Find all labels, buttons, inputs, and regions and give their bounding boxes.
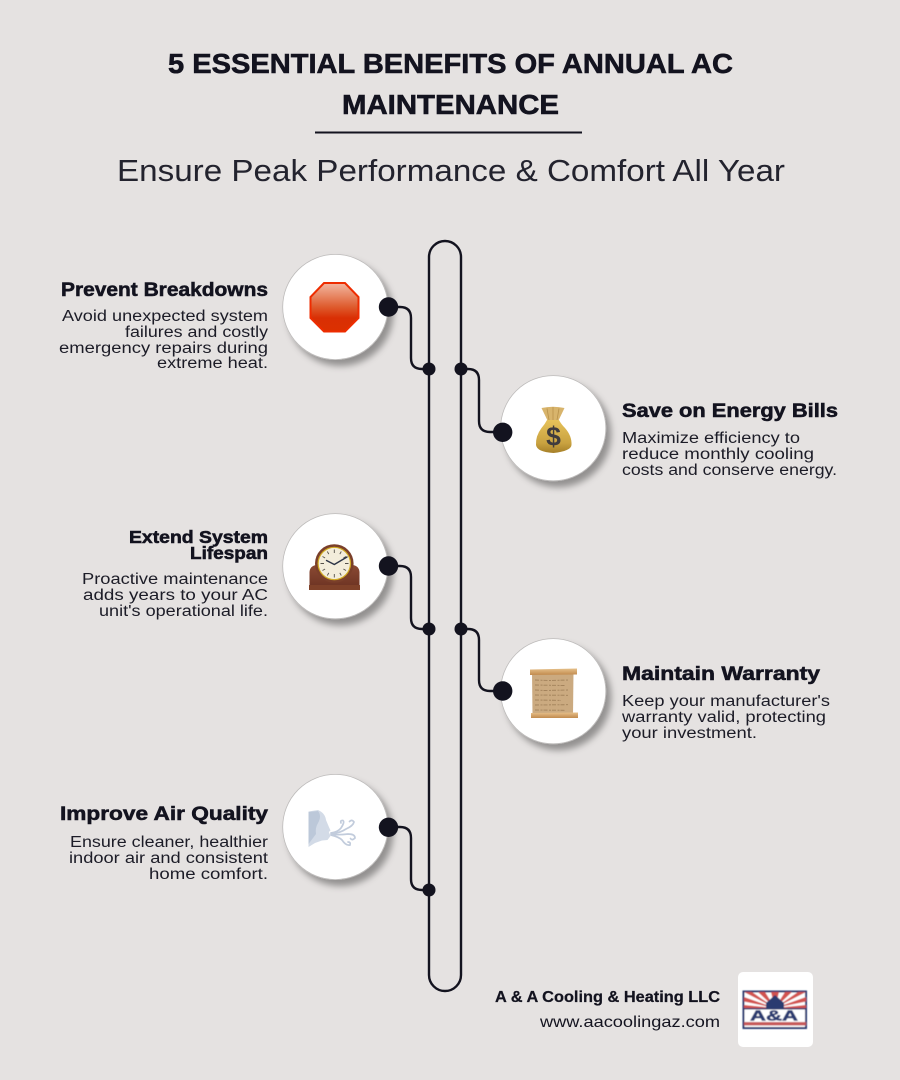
connector 2 xyxy=(461,369,503,432)
connector 4 xyxy=(461,629,503,691)
node 4 xyxy=(454,622,468,636)
description 5 xyxy=(69,834,269,883)
subtitle: Ensure Peak Performance & Comfort All Year xyxy=(117,153,785,188)
heading 2: Save on Energy Bills xyxy=(622,401,838,422)
heading 1: Prevent Breakdowns xyxy=(61,280,268,301)
dot 2 xyxy=(493,423,512,442)
connector 3 xyxy=(389,566,429,629)
node 2 xyxy=(454,362,468,376)
dot 4 xyxy=(493,681,512,701)
description 1 xyxy=(59,308,268,372)
description 1: Avoid unexpected system xyxy=(62,308,268,325)
node 3 xyxy=(422,622,436,636)
heading 3 xyxy=(129,527,268,563)
description 2 xyxy=(622,430,837,479)
central timeline track xyxy=(429,241,461,991)
description 5: Ensure cleaner, healthier xyxy=(70,834,268,851)
benefit: prevent breakdowns xyxy=(59,254,436,376)
icon circle 2 xyxy=(501,376,606,481)
description 1: emergency repairs during xyxy=(59,340,268,357)
description 4: Keep your manufacturer's xyxy=(622,693,830,710)
description 2: reduce monthly cooling xyxy=(622,446,814,463)
description 1: extreme heat. xyxy=(157,355,268,372)
icon: scroll xyxy=(530,668,578,718)
dot 3 xyxy=(379,556,398,576)
company logo: A&A xyxy=(750,1008,799,1024)
dot 5 xyxy=(379,818,398,837)
connector 5 xyxy=(389,827,429,890)
description 4 xyxy=(621,693,830,742)
icon circle 5 xyxy=(283,774,388,880)
connector 1 xyxy=(389,307,429,369)
node 1 xyxy=(422,362,436,376)
title: 5 ESSENTIAL BENEFITS OF ANNUAL AC xyxy=(168,48,733,79)
title: MAINTENANCE xyxy=(342,89,559,120)
description 3: adds years to your AC xyxy=(83,587,268,604)
benefit: save on energy bills xyxy=(454,362,838,481)
description 3: unit's operational life. xyxy=(99,603,268,620)
dot 1 xyxy=(379,297,398,317)
description 2: costs and conserve energy. xyxy=(622,462,837,479)
icon: money bag xyxy=(536,407,572,453)
footer website: www.aacoolingaz.com xyxy=(539,1014,720,1031)
heading 3: Extend System xyxy=(129,527,268,547)
heading 5: Improve Air Quality xyxy=(60,804,269,825)
description 4: warranty valid, protecting xyxy=(621,709,826,726)
description 2: Maximize efficiency to xyxy=(622,430,800,447)
description 5: home comfort. xyxy=(149,866,268,883)
description 1: failures and costly xyxy=(125,324,268,341)
description 5: indoor air and consistent xyxy=(69,850,269,867)
description 3: Proactive maintenance xyxy=(82,571,268,588)
icon: wind face xyxy=(308,810,355,847)
icon circle 4 xyxy=(501,639,606,744)
icon circle 1 xyxy=(283,254,388,360)
heading 4: Maintain Warranty xyxy=(622,664,821,685)
company logo xyxy=(738,972,813,1047)
footer company name: A & A Cooling & Heating LLC xyxy=(495,989,720,1006)
heading 3: Lifespan xyxy=(190,543,268,563)
description 3 xyxy=(82,571,268,620)
icon: stop sign xyxy=(310,283,358,332)
description 4: your investment. xyxy=(622,725,757,742)
icon: money bag: $ xyxy=(546,422,561,452)
benefit: maintain warranty xyxy=(454,622,830,744)
benefit: extend system lifespan xyxy=(82,514,436,636)
icon circle 3 xyxy=(283,514,388,619)
node 5 xyxy=(422,884,436,896)
title xyxy=(168,48,733,120)
benefit: improve air quality xyxy=(60,774,436,896)
icon: mantel clock xyxy=(309,544,360,590)
